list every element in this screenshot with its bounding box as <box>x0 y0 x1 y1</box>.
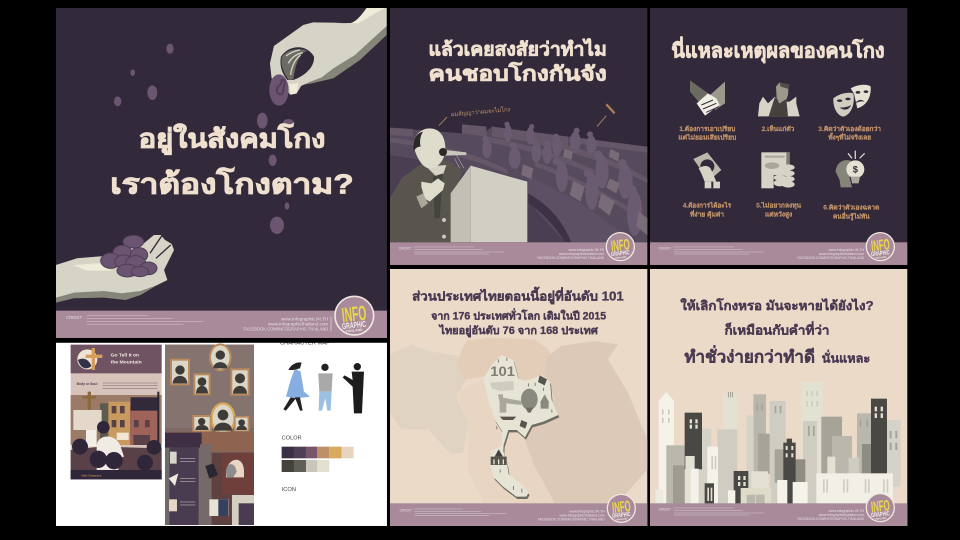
panel: style reference sheet <box>56 340 387 526</box>
logo: infographic thailand: INFO <box>611 498 632 517</box>
heading: closing statement <box>680 297 874 367</box>
panel: easier to do wrong than right <box>650 269 907 526</box>
icon: bottom hand holding coins <box>56 235 174 303</box>
callout: speech text <box>439 105 511 126</box>
text: reason 4: 4.ต้องการได้อะไร <box>683 200 732 209</box>
logo: infographic thailand: THAILAND <box>614 256 627 260</box>
footer bar: www.infographic.IN.TH <box>829 509 864 513</box>
footer bar: www.infographicthailand.com <box>559 252 604 256</box>
text: reason 5: แต่หวังสูง <box>765 210 792 219</box>
logo: infographic thailand <box>606 233 634 261</box>
illustration: city skyline <box>655 382 901 504</box>
heading: panel title: นี่แหละเหตุผลของคนโกง <box>671 35 885 63</box>
illustration: podium <box>451 166 527 242</box>
logo: infographic thailand: INFO <box>870 236 891 255</box>
heading: panel title: คนชอบโกงกันจัง <box>428 61 607 85</box>
footer bar <box>650 242 907 265</box>
logo: infographic thailand: INFO <box>870 497 891 516</box>
footer bar: CREDIT : <box>400 508 414 512</box>
footer bar: FACEBOOK.COM/INFOGRAPHIC.THAILAND <box>797 256 864 260</box>
poster: Go Tell It on the Mountain, church scene: the Mountain <box>111 359 142 365</box>
illustration: character figures <box>283 362 364 413</box>
icon: theatre masks <box>833 85 871 117</box>
text: reason 3: ทั้งๆที่ไม่จริงเลย <box>828 132 871 142</box>
text: reason 3 <box>818 124 881 142</box>
text: reason 4 <box>683 200 732 218</box>
text: color heading: COLOR <box>282 436 302 442</box>
icon: top hand dropping coin <box>269 8 387 106</box>
poster: portraits on a wall <box>165 343 254 525</box>
logo: infographic thailand: INFO <box>610 236 631 255</box>
poster: Go Tell It on the Mountain, church scene: Main Characters <box>82 474 102 478</box>
poster: Go Tell It on the Mountain, church scene <box>71 345 162 479</box>
heading: closing statement: ก็เหมือนกับคำที่ว่า <box>724 320 829 337</box>
footer bar <box>390 242 647 265</box>
legend: color swatches <box>282 447 354 472</box>
text: reason 1 <box>678 124 736 142</box>
heading: ranking text: ไทยอยู่อันดับ 76 จาก 168 ประเทศ <box>438 324 598 338</box>
panel: reasons people cheat <box>650 8 907 265</box>
text: reason 3: 3.คิดว่าตัวเองด้อยกว่า <box>818 124 881 133</box>
icon: selfish person <box>758 82 800 116</box>
logo: infographic thailand: GRAPHIC <box>871 510 890 519</box>
heading: ranking text <box>412 286 624 338</box>
text: reason 6 <box>823 204 879 221</box>
footer bar: www.infographicthailand.com <box>819 252 864 256</box>
panel: Thailand corruption ranking <box>390 269 647 526</box>
panel: living in a corrupt society <box>56 8 387 338</box>
footer bar: www.infographicthailand.com <box>819 513 864 517</box>
footer bar <box>390 503 647 526</box>
footer bar: www.infographic.IN.TH <box>569 510 605 514</box>
text: reason 6: 6.คิดว่าตัวเองฉลาด <box>823 204 879 212</box>
icon: gavel <box>597 104 615 127</box>
logo: infographic thailand: THAILAND <box>874 256 887 260</box>
map: Thailand with landmarks <box>483 355 559 499</box>
footer bar: CREDIT : <box>659 508 673 512</box>
logo: infographic thailand: GRAPHIC <box>342 319 367 331</box>
footer bar: FACEBOOK.COM/INFOGRAPHIC.THAILAND <box>243 326 329 331</box>
heading: main title: เราต้องโกงตาม? <box>110 166 354 199</box>
icon: head with dollar lightbulb: $ <box>853 165 859 175</box>
text: character map heading: CHARACTER MAP <box>280 341 330 347</box>
heading: closing statement: นั่นแหละ <box>822 350 870 366</box>
logo: infographic thailand <box>866 494 894 522</box>
footer bar: www.infographic.IN.TH <box>829 248 864 252</box>
logo: infographic thailand: GRAPHIC <box>871 249 890 258</box>
logo: infographic thailand: INFO <box>341 302 368 327</box>
text: reason 2: 2.เห็นแก่ตัว <box>762 124 795 133</box>
text: reason 5: 5.ไม่อยากลงทุน <box>756 201 802 210</box>
icon: hand holding money <box>693 152 721 188</box>
logo: infographic thailand: GRAPHIC <box>612 511 631 520</box>
heading: ranking text: จาก 176 ประเทศทั่วโลก เดิมในปี 2015 <box>431 307 606 322</box>
logo: infographic thailand: THAILAND <box>345 328 363 334</box>
logo: infographic thailand: THAILAND <box>874 517 887 521</box>
footer bar: FACEBOOK.COM/INFOGRAPHIC.THAILAND <box>537 256 604 260</box>
heading: main title: อยู่ในสังคมโกง <box>139 122 325 155</box>
poster: Go Tell It on the Mountain, church scene: Body or Soul <box>77 382 97 386</box>
heading: closing statement: ทำชั่วง่ายกว่าทำดี <box>684 345 815 367</box>
poster: Go Tell It on the Mountain, church scene: Go Tell It on <box>111 353 139 359</box>
icon: banknote and coin stacks <box>761 152 796 189</box>
text: reason 1: 1.ต้องการเอาเปรียบ <box>679 124 735 133</box>
map: Thailand with landmarks: 101 <box>490 363 515 379</box>
footer bar: FACEBOOK.COM/INFOGRAPHIC.THAILAND <box>797 517 864 521</box>
heading: main title <box>110 122 354 199</box>
footer bar: CREDIT : <box>66 315 84 320</box>
footer bar: www.infographicthailand.com <box>560 514 605 518</box>
illustration: parliament benches <box>390 122 647 242</box>
illustration: speaker with long nose <box>390 128 466 242</box>
text: reason 5 <box>756 201 802 219</box>
heading: panel title: แล้วเคยสงสัยว่าทำไม <box>428 38 607 60</box>
footer bar <box>650 503 907 526</box>
callout: speech text: ผมสัญญาว่าผมจะไม่โกง <box>451 105 511 118</box>
logo: infographic thailand <box>866 233 894 261</box>
text: reason 1: แต่ไม่ยอมเสียเปรียบ <box>678 133 736 142</box>
footer bar: www.infographic.IN.TH <box>281 316 328 321</box>
logo: infographic thailand: THAILAND <box>615 517 628 522</box>
heading: closing statement: ให้เลิกโกงหรอ มันจะหายได้ยังไง? <box>680 297 874 313</box>
footer bar: CREDIT : <box>659 247 673 251</box>
panel: why do people like to cheat <box>390 8 647 265</box>
text: reason 6: คนอื่นรู้ไม่ทัน <box>833 211 870 221</box>
footer bar: FACEBOOK.COM/INFOGRAPHIC.THAILAND <box>538 518 605 522</box>
logo: infographic thailand <box>335 296 374 335</box>
heading: ranking text: ส่วนประเทศไทยตอนนี้อยู่ที่อันดับ 101 <box>412 286 624 304</box>
icon: falling coins <box>114 44 294 234</box>
logo: infographic thailand: GRAPHIC <box>611 249 630 258</box>
icon: handshake <box>690 80 725 116</box>
footer bar: www.infographic.IN.TH <box>569 248 604 252</box>
footer bar: CREDIT : <box>399 247 413 251</box>
text: reason 4: ที่ง่าย คุ้มค่า <box>690 209 724 218</box>
icon: head with dollar lightbulb <box>836 151 865 187</box>
footer bar <box>56 311 387 338</box>
heading: panel title <box>428 38 607 85</box>
footer bar: www.infographicthailand.com <box>268 321 328 326</box>
text: icon heading: ICON <box>282 487 296 493</box>
map: neighbouring countries background <box>390 338 647 503</box>
logo: infographic thailand <box>607 494 635 522</box>
